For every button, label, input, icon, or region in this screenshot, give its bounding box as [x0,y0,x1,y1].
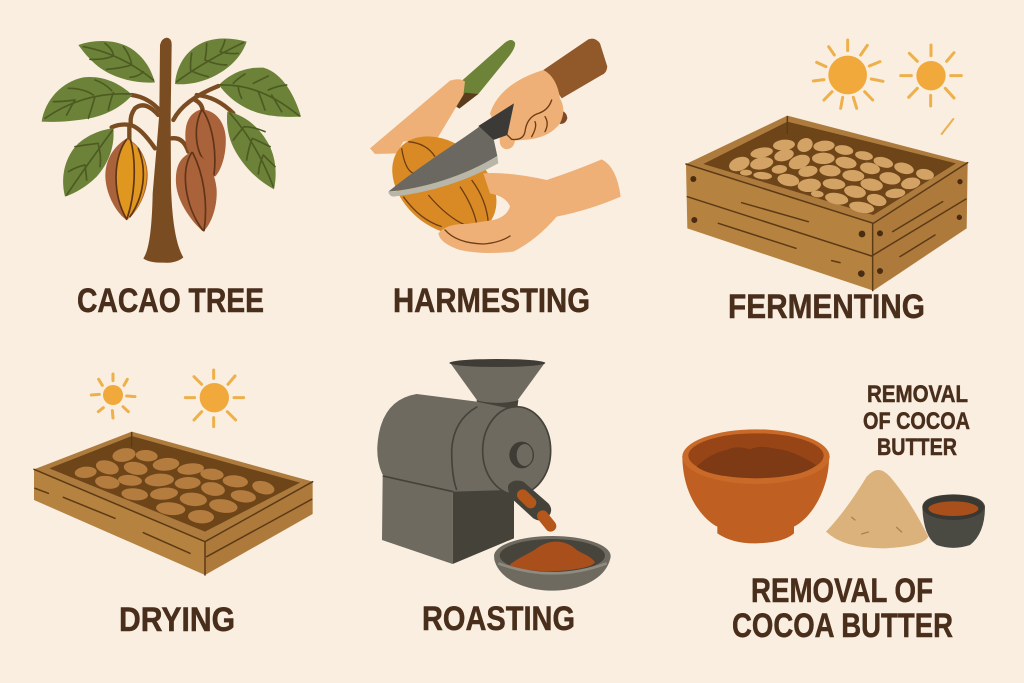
sun large [185,370,244,427]
upper hand with sleeve [490,39,607,149]
green stalk [455,40,515,109]
control knob [509,442,534,468]
roaster base [382,477,514,564]
left hand [370,79,465,154]
cacao pod lower right [176,152,217,232]
wooden crate [686,116,968,291]
bowl of roasted beans [494,536,611,591]
panel: cacao tree illustration [42,38,301,263]
leaf mid left [42,77,132,122]
sun small [901,45,961,106]
lower hand [438,159,621,253]
pile of cocoa powder [826,470,928,548]
heading: cacao tree: CACAO TREE [77,282,264,320]
panel: harvesting illustration [370,39,621,255]
heading: removal of cocoa butter: REMOVAL OF [751,572,933,610]
leaf top right [175,39,247,84]
chute with beans [508,481,551,526]
large clay bowl [682,429,830,543]
small caption: removal of cocoa butter [863,381,970,461]
cacao pod orange [105,138,148,220]
small dark bowl [922,494,985,548]
heading: removal of cocoa butter: COCOA BUTTER [732,607,953,645]
heading: fermenting: FERMENTING [728,288,925,326]
stray ray [942,119,953,134]
small caption: removal of cocoa butter: REMOVAL [867,381,968,408]
sun small [91,374,135,418]
drying tray [34,432,313,575]
panel: drying illustration [34,370,313,575]
small caption: removal of cocoa butter: BUTTER [877,434,957,461]
sun large [813,40,883,108]
tree trunk [143,38,183,263]
leaf mid right [219,68,301,117]
panel: fermenting illustration [686,40,968,291]
hopper [449,359,545,415]
heading: roasting: ROASTING [422,600,575,638]
heading: harvesting: HARMESTING [393,282,590,320]
cacao pod being cut [373,116,516,255]
heading: removal of cocoa butter [732,572,953,645]
leaf top left [78,41,155,83]
panel: roasting illustration [377,359,611,591]
fermenting beans [727,135,935,215]
drying beans [74,446,276,524]
knife [388,103,514,197]
leaf lower right [227,112,276,189]
small caption: removal of cocoa butter: OF COCOA [863,408,970,435]
cacao pod upper right [185,109,226,177]
panel: cocoa butter removal illustration [682,429,985,548]
heading: drying: DRYING [119,601,235,639]
leaf lower left [63,128,114,197]
roaster drum [377,394,551,495]
tree branches [112,86,233,152]
